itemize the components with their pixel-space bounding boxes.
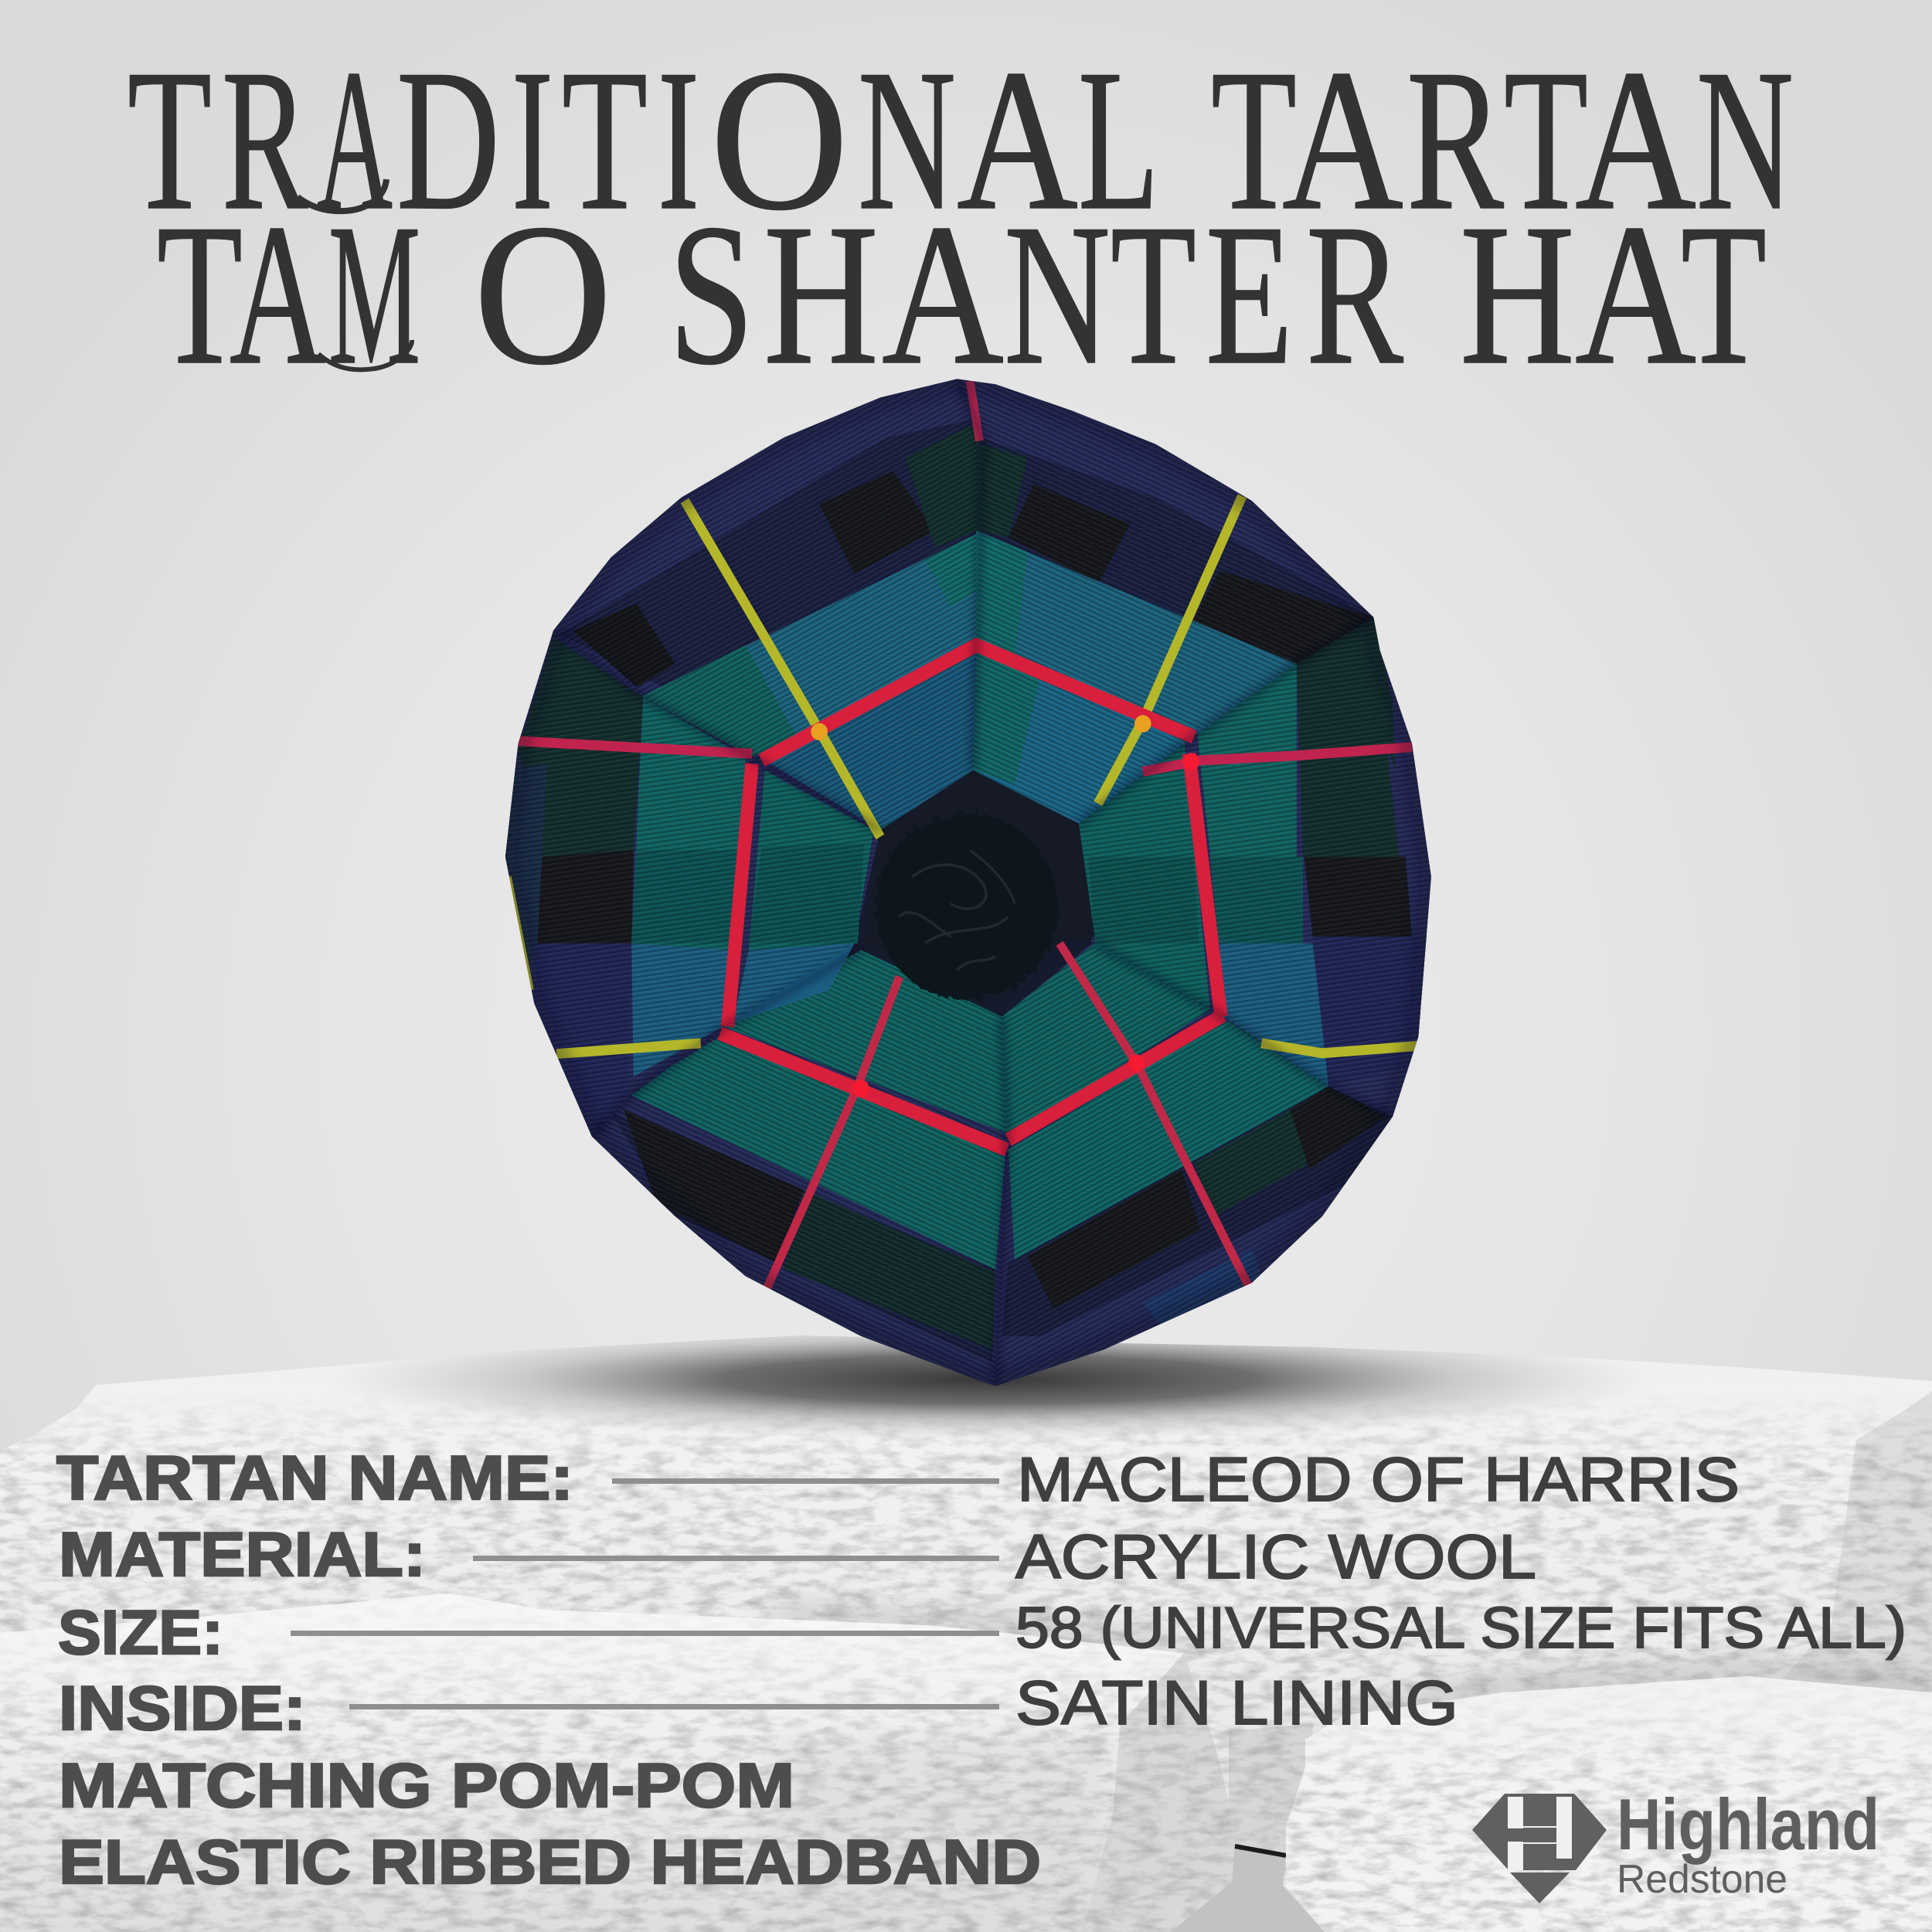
value: size: 58 (UNIVERSAL SIZE FITS ALL) bbox=[1015, 1595, 1906, 1660]
feature: matching pom-pom: MATCHING POM-POM bbox=[59, 1751, 794, 1821]
value: satin lining: SATIN LINING bbox=[1015, 1668, 1458, 1738]
title line 2: A bbox=[1575, 182, 1696, 406]
logo bbox=[1472, 1784, 1879, 1903]
title line 1: A bbox=[1575, 28, 1696, 252]
spec values bbox=[1015, 1445, 1906, 1738]
hat bbox=[505, 379, 1431, 1386]
hat thin red stripes bbox=[518, 381, 1412, 1293]
hat panel: bottom right bbox=[995, 944, 1393, 1386]
title line 2: M bbox=[328, 182, 420, 406]
connector lines bbox=[291, 1478, 999, 1709]
value: acrylic wool: ACRYLIC WOOL bbox=[1015, 1522, 1536, 1592]
panel: floor gap bbox=[1171, 1846, 1325, 1932]
lower rock cast shadows bbox=[773, 1611, 1932, 1719]
panel: lower right rock bbox=[1283, 1676, 1932, 1932]
title swash R bbox=[298, 179, 386, 211]
title line 1: T bbox=[1504, 28, 1588, 252]
title line 1: I bbox=[658, 28, 699, 252]
title line 1: A bbox=[317, 28, 393, 252]
title line 1: R bbox=[222, 28, 309, 252]
title line 1: T bbox=[562, 28, 648, 252]
title swash M bbox=[318, 340, 412, 369]
hat stripe crossings bbox=[811, 715, 1199, 1097]
title line 1: N bbox=[858, 28, 956, 252]
title line 2: A bbox=[882, 182, 1004, 406]
title line 1: T bbox=[1211, 28, 1297, 252]
logo wordmark: highland: Highland bbox=[1617, 1784, 1879, 1865]
title line 2: O bbox=[474, 182, 612, 406]
title line 1: R bbox=[1406, 28, 1505, 252]
title line 2: E bbox=[1206, 182, 1293, 406]
label: material: MATERIAL: bbox=[59, 1520, 426, 1590]
hat pom-pom bbox=[876, 814, 1058, 1000]
hat panel: left bbox=[505, 631, 880, 1136]
label: inside: INSIDE: bbox=[59, 1674, 306, 1743]
hat panel: top left bbox=[553, 379, 983, 830]
hat panel: right bbox=[1079, 617, 1431, 1117]
title line 2: T bbox=[1111, 182, 1196, 406]
title line 2: T bbox=[157, 182, 243, 406]
title line 1: L bbox=[1078, 28, 1159, 252]
title line 1: O bbox=[710, 28, 849, 252]
logo icon: diamond monogram bbox=[1472, 1794, 1607, 1903]
hat rim shading bbox=[505, 379, 1431, 1386]
hat shadow bbox=[376, 1335, 1603, 1435]
hat panel: bottom left bbox=[592, 950, 1007, 1386]
spec labels bbox=[56, 1444, 1041, 1897]
panel: back rock slab bbox=[0, 1319, 1932, 1932]
title line 1: I bbox=[512, 28, 553, 252]
title line 2: H bbox=[764, 182, 879, 406]
floor contact line bbox=[1235, 1846, 1286, 1855]
logo wordmark: redstone: Redstone bbox=[1617, 1857, 1787, 1902]
hat seams bbox=[553, 379, 1393, 1386]
title line 1: A bbox=[1282, 28, 1403, 252]
title line 2: S bbox=[668, 182, 754, 406]
title line 1: N bbox=[1696, 28, 1794, 252]
title line 2: R bbox=[1306, 182, 1404, 406]
feature: elastic ribbed headband: ELASTIC RIBBED HEADBAND bbox=[59, 1828, 1041, 1897]
label: tartan name: TARTAN NAME: bbox=[56, 1444, 573, 1513]
hat base bbox=[464, 371, 1468, 1415]
hat panel: top right bbox=[957, 379, 1373, 824]
title line 2: H bbox=[1460, 182, 1575, 406]
title line 2: N bbox=[1004, 182, 1111, 406]
hat crown centre bbox=[864, 770, 1095, 1000]
title line 1: D bbox=[396, 28, 500, 252]
title bbox=[128, 28, 1794, 406]
panel: lower left rock bbox=[0, 1592, 1236, 1932]
label: size: SIZE: bbox=[58, 1598, 223, 1668]
value: macleod of harris: MACLEOD OF HARRIS bbox=[1017, 1445, 1740, 1515]
title line 2: T bbox=[1681, 182, 1767, 406]
title line 1: T bbox=[128, 28, 212, 252]
hat yellow stripes bbox=[509, 496, 1418, 1054]
title line 1: A bbox=[957, 28, 1078, 252]
hat red hexagon bbox=[720, 645, 1223, 1150]
title line 2: A bbox=[230, 182, 326, 406]
